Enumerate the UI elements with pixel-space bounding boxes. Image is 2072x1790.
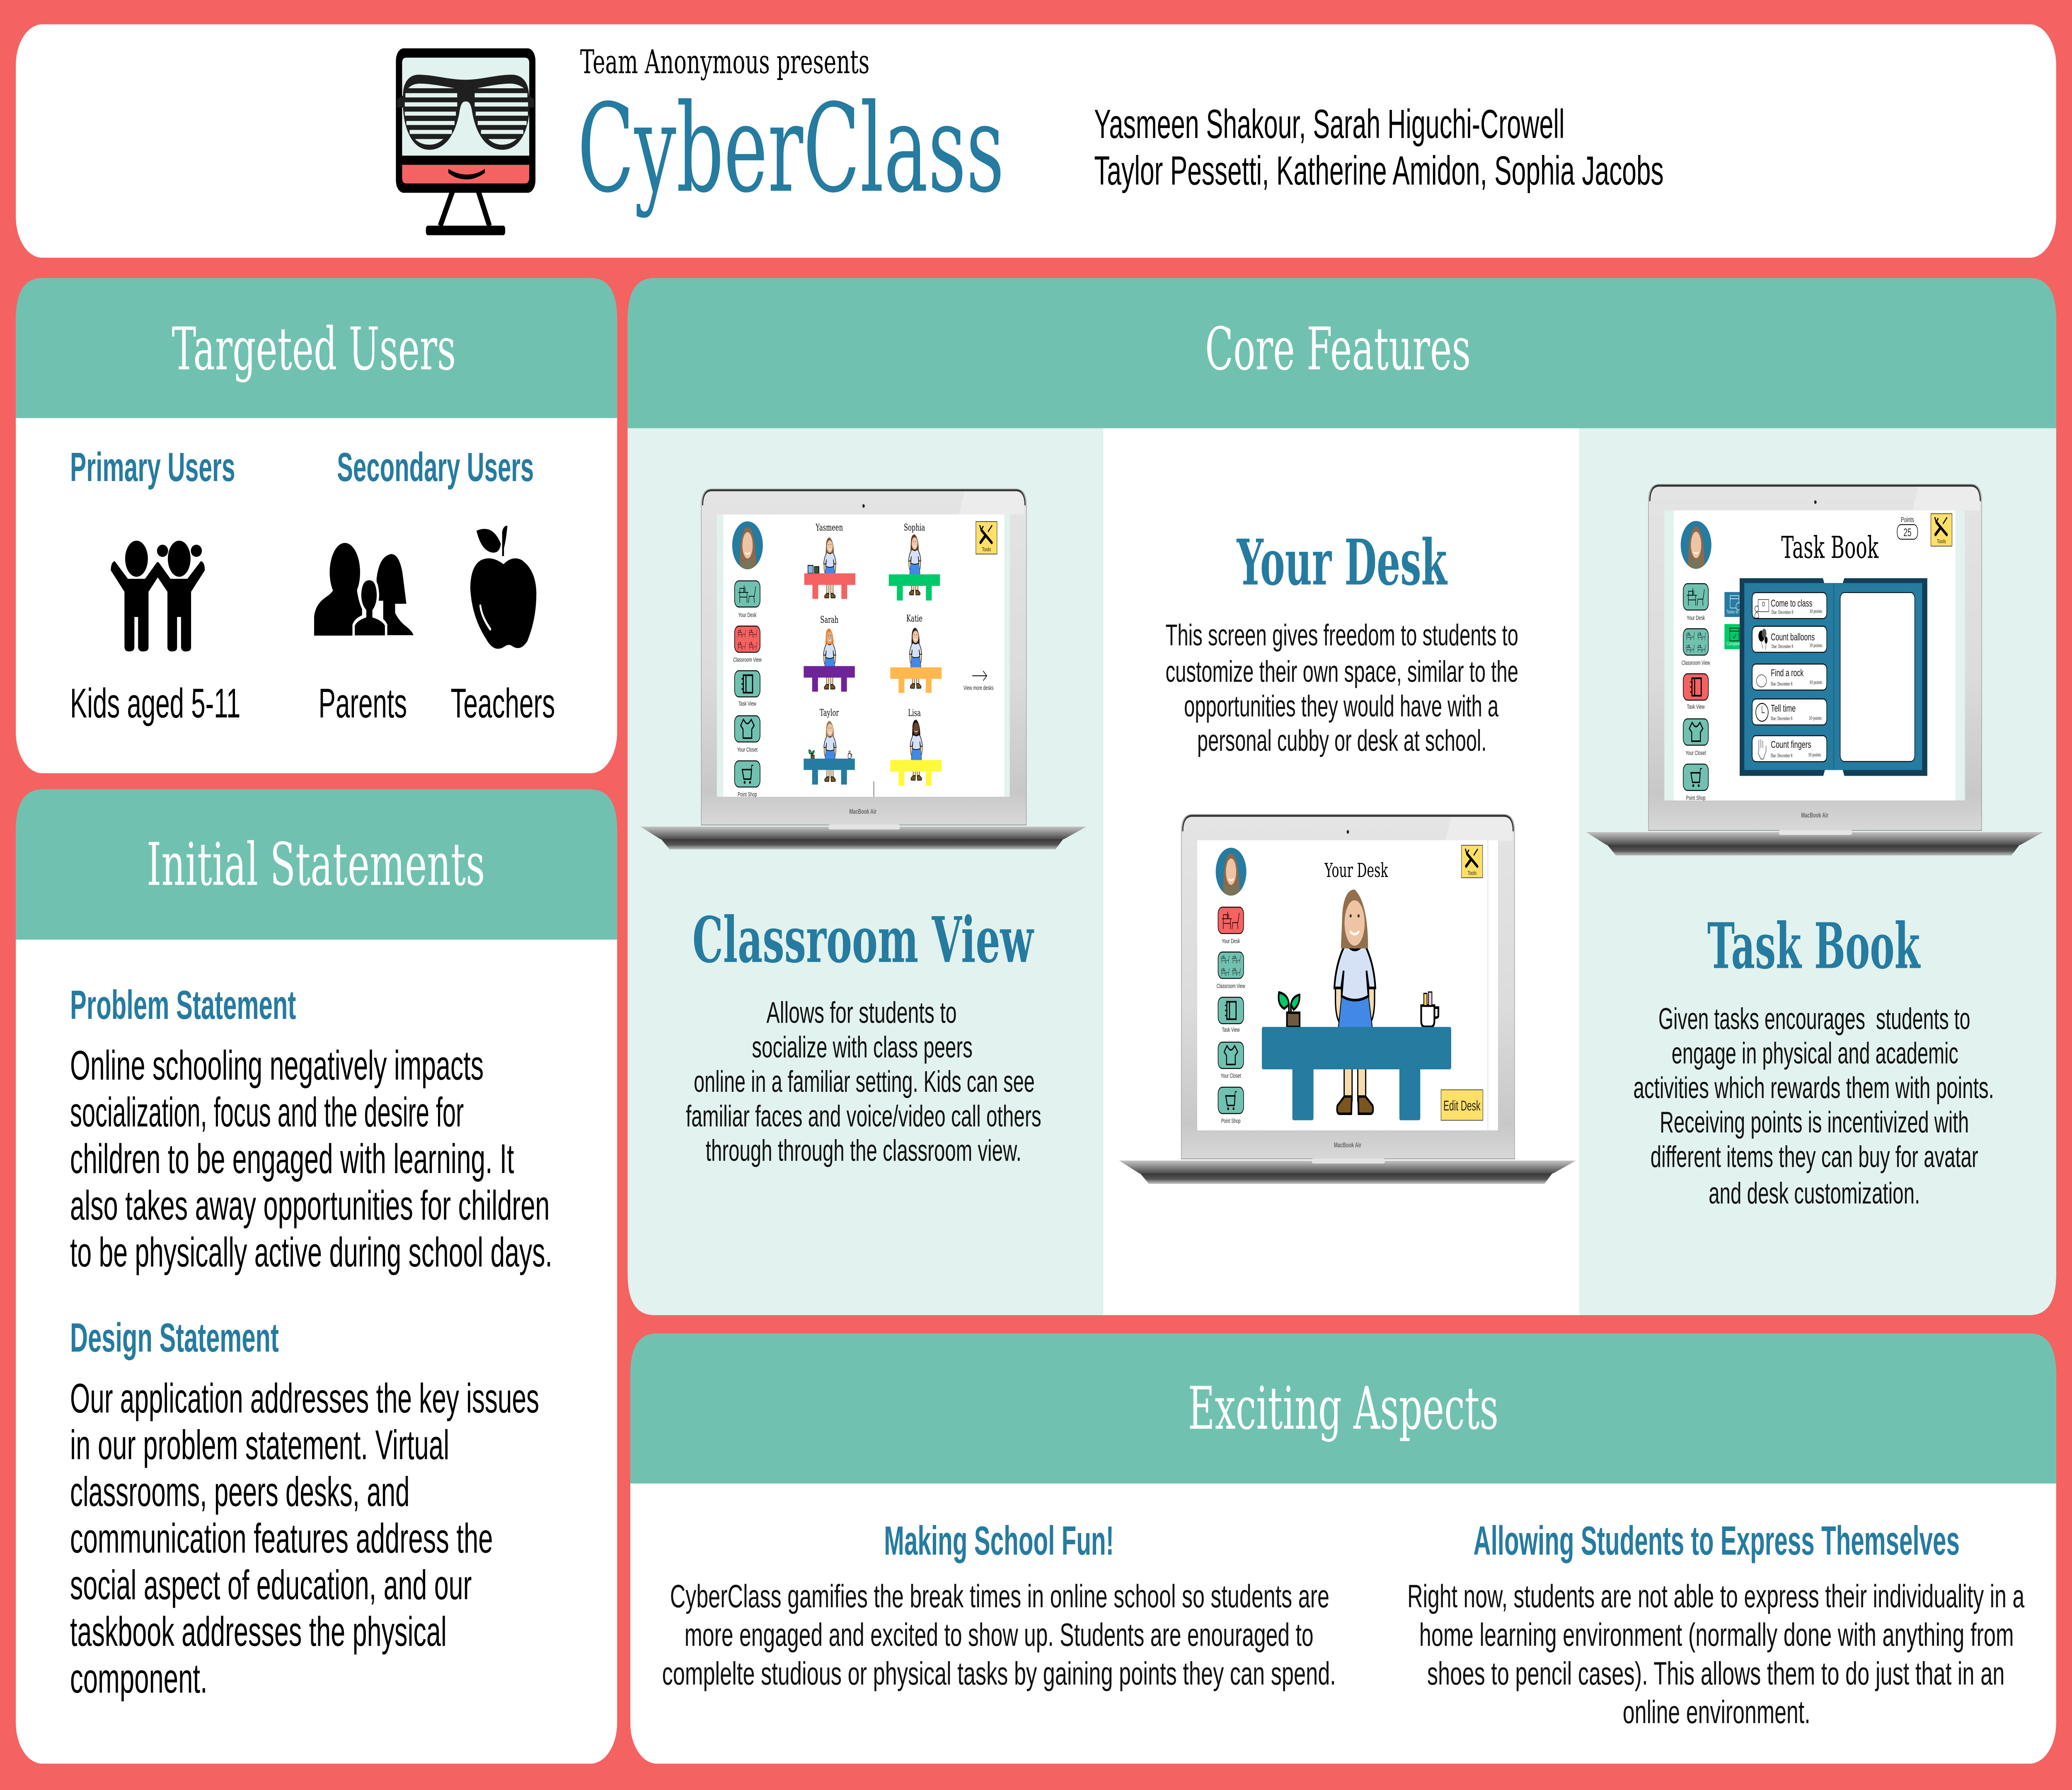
desk: Sophia xyxy=(889,522,940,600)
text: problem statement: Online schooling negatively impacts xyxy=(70,1042,484,1089)
nav: your closet: Your Closet xyxy=(1686,750,1706,757)
nav: classroom view: Classroom View xyxy=(1682,660,1710,666)
laptop: task book screen: MacBook Air xyxy=(1801,811,1828,819)
text: task book xyxy=(1633,1002,1994,1210)
nav: your desk: Your Desk xyxy=(1222,938,1240,945)
icon: parents with child xyxy=(314,543,414,637)
subheading: making school fun: Making School Fun! xyxy=(884,1518,1114,1563)
nav: your desk: Your Desk xyxy=(738,612,757,619)
nav: point shop: Point Shop xyxy=(738,791,757,798)
text: problem statement: to be physically active during school days. xyxy=(70,1229,552,1275)
tab: tasks to do xyxy=(1724,592,1745,617)
text: classroom view: online in a familiar setting. Kids can see xyxy=(694,1065,1035,1098)
panel: exciting aspects xyxy=(630,1333,2056,1763)
nav: task view: Task View xyxy=(738,700,756,707)
text: classroom view: socialize with class peers xyxy=(752,1030,973,1064)
text: design statement: communication features address the xyxy=(70,1515,493,1561)
task: come to class: Come to class xyxy=(1771,598,1812,609)
task: tell time: Due: December 8 xyxy=(1771,716,1792,721)
nav: your desk xyxy=(735,581,760,619)
task: count balloons: Count balloons xyxy=(1771,631,1815,643)
text: problem statement: socialization, focus and the desire for xyxy=(70,1089,464,1135)
task: come to class xyxy=(1752,593,1827,619)
text: making school fun: CyberClass gamifies the break times in online school so students are xyxy=(670,1578,1329,1615)
heading: task book: Task Book xyxy=(1707,910,1921,983)
laptop: your desk screen xyxy=(1119,815,1576,1184)
nav: classroom view: Classroom View xyxy=(733,656,762,663)
label: teachers: Teachers xyxy=(450,680,555,726)
nav: your closet: Your Closet xyxy=(737,746,758,753)
nav: task view xyxy=(1218,997,1244,1033)
panel: initial statements xyxy=(16,789,617,1763)
arrow: view more desks xyxy=(963,671,994,691)
task: count balloons xyxy=(1752,626,1827,652)
task: count fingers: 10 points xyxy=(1808,752,1821,758)
title: CyberClass: CyberClass xyxy=(577,78,1004,220)
heading: Exciting Aspects xyxy=(1188,1375,1498,1443)
desk: Lisa: Lisa xyxy=(908,708,921,718)
text: design statement xyxy=(70,1375,539,1701)
text: making school fun: complelte studious or physical tasks by gaining points they can spend. xyxy=(662,1655,1336,1692)
task: come to class: Due: December 8 xyxy=(1772,610,1793,615)
task: find a rock: Find a rock xyxy=(1771,668,1804,679)
task: tell time: 10 points xyxy=(1809,715,1822,721)
nav: task view xyxy=(1683,674,1708,710)
team members xyxy=(1094,101,1664,194)
tab: completed xyxy=(1724,624,1745,649)
right page xyxy=(1840,593,1915,762)
book xyxy=(1740,578,1927,776)
tools button xyxy=(1931,514,1952,546)
tab: completed: Completed xyxy=(1727,641,1743,647)
text: task book: and desk customization. xyxy=(1709,1176,1920,1210)
plant xyxy=(1278,992,1300,1027)
laptop: task book screen xyxy=(1586,484,2043,856)
text: classroom view xyxy=(686,996,1041,1167)
task: count balloons: Due: December 8 xyxy=(1772,643,1793,649)
panel: title header xyxy=(16,24,2056,258)
tools button xyxy=(976,522,997,554)
team members: Yasmeen Shakour, Sarah Higuchi-Crowell xyxy=(1094,101,1565,147)
task: tell time: Tell time xyxy=(1771,703,1796,714)
text: task book: Receiving points is incentivized with xyxy=(1660,1105,1969,1139)
nav: your desk xyxy=(1683,584,1708,621)
desk: Taylor: Taylor xyxy=(820,707,839,718)
text: classroom view: through through the classroom view. xyxy=(706,1134,1021,1167)
text: classroom view: Allows for students to xyxy=(766,996,957,1029)
tab: tasks to do: Tasks to do xyxy=(1726,610,1743,615)
nav: classroom view xyxy=(1682,629,1710,666)
nav: point shop xyxy=(1218,1087,1244,1125)
nav: point shop xyxy=(1683,764,1708,801)
icon: two kids xyxy=(111,541,205,651)
text: your desk: opportunities they would have with a xyxy=(1184,689,1498,723)
desk xyxy=(1262,1027,1451,1120)
text: express themselves: shoes to pencil cases). This allows them to do just that in an xyxy=(1427,1655,2004,1692)
edit desk button: Edit Desk xyxy=(1443,1098,1481,1114)
subheading: design statement: Design Statement xyxy=(70,1315,279,1360)
mug with pencils xyxy=(1421,992,1438,1027)
avatar xyxy=(732,521,763,570)
desk: Yasmeen: Yasmeen xyxy=(816,522,843,533)
nav: point shop xyxy=(735,761,760,798)
edit desk button xyxy=(1441,1090,1483,1120)
text: task book: engage in physical and academic xyxy=(1672,1036,1958,1070)
text: task book: Given tasks encourages students to xyxy=(1658,1002,1970,1035)
desk: Lisa xyxy=(890,708,942,786)
text: task book: different items they can buy for avatar xyxy=(1651,1140,1978,1173)
text: design statement: classrooms, peers desks, and xyxy=(70,1468,410,1515)
nav: your desk xyxy=(1218,907,1244,945)
task: count balloons: 10 points xyxy=(1809,643,1822,648)
heading: Core Features xyxy=(1205,315,1471,384)
task: come to class: 10 points xyxy=(1809,609,1822,614)
nav: classroom view xyxy=(733,626,762,663)
laptop: classroom view screen: MacBook Air xyxy=(849,808,877,815)
text: problem statement xyxy=(70,1042,552,1275)
presenter line: Team Anonymous presents xyxy=(580,43,869,81)
text: design statement: component. xyxy=(70,1655,208,1701)
desk: Yasmeen xyxy=(804,522,855,599)
nav: point shop: Point Shop xyxy=(1221,1118,1241,1125)
text: problem statement: children to be engaged with learning. It xyxy=(70,1135,514,1182)
text: design statement: Our application addresses the key issues xyxy=(70,1375,539,1421)
points counter: Points xyxy=(1901,516,1914,524)
tools button xyxy=(1462,845,1483,878)
desk: Katie: Katie xyxy=(906,613,922,624)
nav: your closet: Your Closet xyxy=(1221,1072,1241,1079)
text: your desk: customize their own space, similar to the xyxy=(1165,655,1518,688)
subheading: express themselves: Allowing Students to Express Themselves xyxy=(1473,1518,1960,1563)
nav: your closet xyxy=(1218,1042,1244,1079)
task: find a rock: 10 points xyxy=(1809,680,1822,685)
subheading: secondary users: Secondary Users xyxy=(337,444,534,490)
text: express themselves: online environment. xyxy=(1623,1694,1811,1730)
subheading: problem statement: Problem Statement xyxy=(70,982,296,1028)
arrow: view more desks: View more desks xyxy=(963,685,994,691)
nav: your closet xyxy=(735,716,760,753)
avatar xyxy=(1216,848,1247,896)
text: design statement: in our problem statement. Virtual xyxy=(70,1421,449,1468)
task: find a rock xyxy=(1752,664,1827,690)
text: your desk: This screen gives freedom to students to xyxy=(1165,618,1518,652)
avatar xyxy=(1681,521,1711,569)
text: design statement: social aspect of education, and our xyxy=(70,1561,472,1608)
nav: task view xyxy=(735,671,760,707)
text: express themselves: home learning environment (normally done with anything from xyxy=(1419,1617,2014,1653)
subheading: primary users: Primary Users xyxy=(70,444,235,490)
task: count fingers: Count fingers xyxy=(1771,739,1811,750)
heading: Targeted Users xyxy=(172,315,456,384)
nav: classroom view: Classroom View xyxy=(1217,982,1245,989)
text: classroom view: familiar faces and voice/video call others xyxy=(686,1099,1041,1133)
text: making school fun xyxy=(662,1578,1336,1692)
desk: Sarah xyxy=(804,614,855,692)
text: express themselves: Right now, students are not able to express their individuality in a xyxy=(1407,1578,2024,1615)
screen title: Your Desk xyxy=(1324,860,1388,882)
text: making school fun: more engaged and excited to show up. Students are enouraged to xyxy=(685,1617,1314,1653)
panel: targeted users xyxy=(16,278,617,773)
panel: core features xyxy=(628,278,2056,1315)
laptop: your desk screen: MacBook Air xyxy=(1334,1141,1361,1149)
team members: Taylor Pessetti, Katherine Amidon, Sophia Jacobs xyxy=(1094,148,1664,194)
text: problem statement: also takes away opportunities for children xyxy=(70,1182,550,1229)
points counter: 25 xyxy=(1903,526,1912,539)
text: express themselves xyxy=(1407,1578,2024,1730)
nav: your desk: Your Desk xyxy=(1687,614,1705,621)
task: tell time xyxy=(1752,699,1827,725)
text: task book: activities which rewards them with points. xyxy=(1633,1071,1994,1104)
nav: task view: Task View xyxy=(1222,1026,1240,1033)
heading: classroom view: Classroom View xyxy=(692,904,1034,977)
avatar figure xyxy=(1334,890,1375,1114)
laptop: classroom view screen xyxy=(641,489,1087,849)
desk: Taylor xyxy=(804,707,855,785)
nav: classroom view xyxy=(1217,952,1245,989)
icon: apple xyxy=(470,526,536,649)
points counter xyxy=(1897,516,1918,539)
label: parents: Parents xyxy=(318,680,407,726)
heading: your desk: Your Desk xyxy=(1236,526,1447,600)
task: count fingers: Due: December 8 xyxy=(1771,753,1792,759)
screen title: Task Book xyxy=(1781,530,1879,565)
text: your desk: personal cubby or desk at school. xyxy=(1197,724,1486,757)
nav: point shop: Point Shop xyxy=(1686,794,1706,801)
desk: Katie xyxy=(890,613,942,693)
desk: Sarah: Sarah xyxy=(820,614,838,625)
nav: your closet xyxy=(1683,719,1708,757)
text: your desk xyxy=(1165,618,1518,757)
text: design statement: taskbook addresses the physical xyxy=(70,1608,447,1655)
desk: Sophia: Sophia xyxy=(904,522,925,533)
task: find a rock: Due: December 8 xyxy=(1771,681,1792,687)
nav: task view: Task View xyxy=(1687,703,1705,710)
icon: monitor with striped sunglasses logo xyxy=(396,48,535,235)
task: count fingers xyxy=(1752,736,1827,762)
heading: Initial Statements xyxy=(147,831,485,899)
label: kids aged 5-11: Kids aged 5-11 xyxy=(70,680,240,726)
